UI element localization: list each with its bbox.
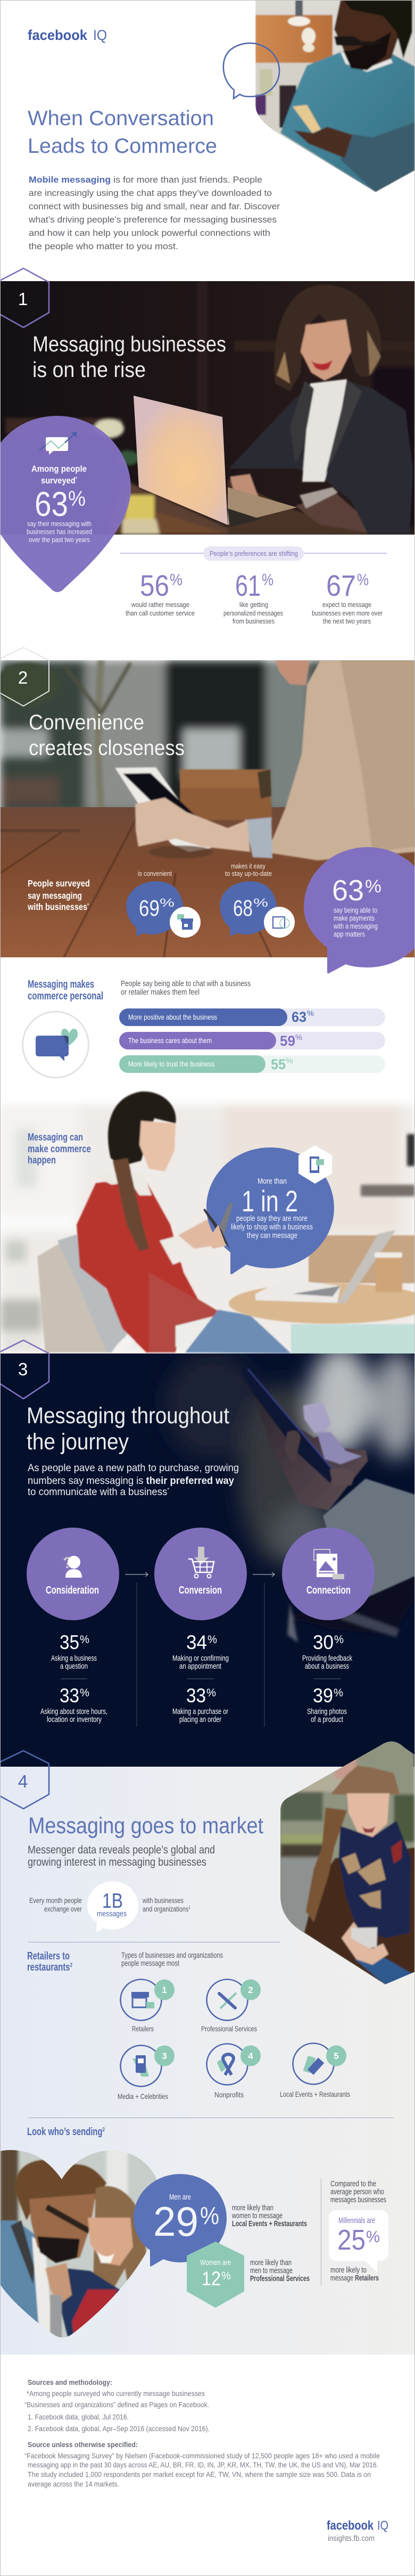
callout: millennials 25 percent: Millennials are: [338, 2216, 375, 2225]
text: people say being able to chat: People say being able to chat with a business: [121, 980, 251, 988]
stats: connection: of a product: [311, 1716, 343, 1724]
section 2 title: creates closeness: [29, 736, 185, 760]
callout: 63 percent payments: [304, 847, 415, 973]
bar: trust 55 percent: More likely to trust the business: [128, 1060, 214, 1068]
stats: consideration: Asking a business: [51, 1654, 97, 1663]
panel: section 4 paper background: [0, 1767, 415, 2355]
section 3 title: [27, 1403, 229, 1455]
panel: connection: Connection: [306, 1585, 351, 1596]
footer: sources and methodology: average across the 14 markets.: [28, 2480, 119, 2488]
bar: cares 59 percent: 59: [280, 1033, 295, 1049]
hexagon badge 4: [0, 1751, 49, 1809]
rank 3: media and celebrities: Media + Celebrities: [118, 2092, 168, 2101]
stats: conversion: an appointment: [179, 1662, 221, 1671]
text: people say being able to chat: or retailer makes them feel: [121, 988, 200, 997]
intro paragraph: [28, 175, 280, 251]
stats: consideration: Asking about store hours,: [40, 1708, 107, 1716]
heading: messaging makes commerce personal: commerce personal: [28, 990, 103, 1002]
text: men more likely: women to message: [231, 2211, 283, 2220]
stat bubble: 69 percent convenient: is convenient: [138, 869, 172, 877]
text: types of businesses: [121, 1951, 223, 1968]
stat: 61 percent: 61: [235, 569, 261, 602]
bar chart: feelings: [119, 1008, 385, 1073]
hexagon badge 2: 2: [18, 668, 28, 687]
rank 4: nonprofits: 4: [248, 2051, 253, 2061]
stats: connection: 30: [313, 1631, 334, 1653]
title: When Conversation: [28, 107, 214, 130]
panel: section 1 photo, woman with laptop: [0, 281, 415, 535]
bar: cares 59 percent: The business cares about them: [128, 1036, 212, 1045]
rank 1: retailers: [120, 1980, 175, 2033]
stat: 61 percent: %: [262, 570, 273, 589]
text: people surveyed say: with businesses: [28, 901, 99, 912]
bar: trust 55 percent: %: [286, 1056, 293, 1065]
callout: millennials 25 percent: [329, 2210, 388, 2273]
hexagon badge 4: 4: [18, 1771, 28, 1791]
icon: ribbon: [217, 2054, 234, 2075]
heading: retailers to restaurants: Retailers to: [27, 1950, 70, 1962]
photo: woman in hat with scarf: [277, 1738, 415, 1989]
rank 1: retailers: Retailers: [132, 2024, 154, 2033]
text: women more likely: [250, 2258, 310, 2283]
rank 3: media and celebrities: 3: [162, 2051, 167, 2061]
callout: 63 percent payments: 63: [332, 874, 364, 907]
photo: man in teal sweater looking at phone: [255, 0, 415, 194]
text: people surveyed say: say messaging: [28, 890, 82, 901]
rank 5: local events and restaurants: [280, 2044, 350, 2098]
text: people surveyed say: *: [87, 903, 89, 908]
heading: messaging can make commerce happen: [28, 1132, 91, 1166]
section 1 title: Messaging businesses: [32, 332, 226, 356]
text: women more likely: more likely than: [250, 2258, 292, 2267]
footer: sources and methodology: The study included 1,000 respondents per market except for AE, TW, VN, where the sample size was 500. Data is on: [28, 2470, 371, 2479]
heading: messaging can make commerce happen: Messaging can: [28, 1132, 83, 1143]
icon: photo cards: [314, 1549, 344, 1579]
text: messaging increased: say their messaging with: [27, 520, 92, 528]
text: men more likely: more likely than: [232, 2203, 273, 2212]
icon: store: [131, 1992, 154, 2008]
section 3 title: Messaging throughout: [27, 1403, 229, 1429]
panel: consideration: [27, 1528, 119, 1620]
heading: messaging makes commerce personal: Messaging makes: [28, 979, 94, 990]
stats: conversion: 34: [186, 1631, 207, 1653]
intro paragraph: are increasingly using the chat apps they’ve downloaded to: [29, 188, 272, 198]
footer: sources and methodology: [24, 2378, 380, 2488]
stat: 56 percent: [126, 569, 195, 617]
icon: outlined speech bubble: [223, 43, 279, 99]
panel: conversion: [154, 1528, 247, 1620]
heading: among people surveyed: surveyed: [41, 475, 81, 486]
heading: among people surveyed: [31, 464, 87, 486]
callout: 1 in 2 people: people say they are more: [236, 1215, 308, 1223]
heading: look who's sending: Look who’s sending: [27, 2126, 129, 2138]
stat: 67 percent: [312, 569, 383, 625]
callout: 63 percent payments: make payments: [334, 914, 375, 922]
stat: 1B messages: 1: [189, 1905, 190, 1910]
stat: 67 percent: businesses even more over: [312, 610, 383, 617]
intro paragraph: and how it can help you unlock powerful connections with: [29, 228, 270, 238]
rank 4: nonprofits: [206, 2044, 261, 2099]
hexagon badge 2: [0, 647, 49, 706]
callout: men 29 percent: %: [200, 2202, 219, 2229]
text: men more likely: Local Events + Restaurants: [232, 2219, 307, 2228]
text: messaging increased: [27, 520, 92, 544]
callout: 1 in 2 people: 1 in 2: [242, 1184, 298, 1218]
text: men more likely: [231, 2203, 307, 2228]
stats: conversion: [172, 1631, 229, 1724]
stat: 61 percent: like getting: [239, 601, 268, 609]
logo: facebook IQ footer: [327, 2518, 388, 2543]
heading: among people surveyed: *: [76, 476, 77, 481]
stat: 1B messages: exchange over: [44, 1905, 82, 1913]
rank 1: retailers: 1: [162, 1985, 167, 1995]
section 3 intro text: [28, 1463, 239, 1498]
icon: person with question: [63, 1554, 82, 1578]
stat: 67 percent: the next two years: [323, 618, 371, 625]
text: people say being able to chat: [121, 980, 251, 997]
text: messaging increased: over the past two years: [29, 536, 90, 544]
stat: 56 percent: %: [170, 570, 182, 589]
intro paragraph: the people who matter to you most.: [29, 241, 178, 251]
section 2 title: Convenience: [29, 711, 144, 734]
hexagon badge 3: [0, 1340, 49, 1399]
logo: facebook IQ: facebook: [28, 27, 88, 43]
section 1 title: is on the rise: [32, 357, 146, 382]
arrow 1: [125, 1572, 148, 1577]
section 4 subtitle: [28, 1844, 215, 1868]
panel: section 2 photo, woman with tablet: [0, 660, 415, 957]
stat: 63 percent: 63: [35, 485, 68, 523]
stats: consideration: %: [80, 1687, 89, 1699]
text: millennials more likely: more likely to: [330, 2266, 367, 2275]
section 4 subtitle: growing interest in messaging businesses: [28, 1856, 206, 1868]
icon: speech bubble with heart: [22, 1012, 88, 1078]
icon: calendar: [264, 907, 295, 938]
callout: men 29 percent: Men are: [169, 2193, 191, 2202]
heading: look who's sending: 2: [102, 2127, 105, 2133]
footer: sources and methodology: “Facebook Messaging Survey” by Nielsen (Facebook-commissioned study of 12,500 people ages 18+ who used a mobile: [24, 2451, 380, 2460]
stats: conversion: Making a purchase or: [172, 1708, 228, 1716]
intro paragraph: connect with businesses big and small, near and far. Discover: [29, 201, 280, 211]
rank 3: media and celebrities: [118, 2046, 175, 2101]
panel: connection: [282, 1528, 375, 1620]
stat: 67 percent: expect to message: [322, 601, 371, 609]
callout: 1 in 2 people: More than: [258, 1177, 287, 1186]
stats: conversion: placing an order: [179, 1716, 221, 1724]
footer: sources and methodology: “Businesses and organizations” defined as Pages on Facebook.: [24, 2400, 209, 2409]
arrow 2: [253, 1572, 275, 1577]
hexagon badge 3: 3: [18, 1359, 28, 1379]
text: millennials more likely: message Retailers: [330, 2274, 379, 2283]
stats: connection: %: [334, 1634, 344, 1646]
stats: consideration: %: [80, 1634, 89, 1646]
section 4 subtitle: Messenger data reveals people’s global and: [28, 1844, 215, 1856]
logo: facebook IQ: IQ: [93, 27, 107, 43]
bar: trust 55 percent: 55: [271, 1056, 286, 1072]
section 1 title: [32, 332, 226, 382]
panel: consideration: Consideration: [46, 1585, 99, 1596]
text: women more likely: men to message: [250, 2266, 293, 2275]
icon: wrench and screwdriver: [219, 1993, 236, 2008]
stats: connection: Providing feedback: [302, 1654, 353, 1663]
heading: retailers to restaurants: [27, 1950, 72, 1973]
bar: more positive 63 percent: %: [307, 1009, 314, 1018]
footer: sources and methodology: *Among people surveyed who currently message businesses: [27, 2389, 205, 2398]
icon: storefront: [170, 907, 201, 938]
callout: 63 percent payments: app matters: [334, 930, 365, 938]
icon: phone with message in hexagon: [298, 1145, 332, 1184]
stats: consideration: [40, 1631, 107, 1724]
section 3 intro text: numbers say messaging is their preferred way: [28, 1475, 234, 1487]
stat: 56 percent: would rather message: [131, 601, 189, 609]
stat: 61 percent: [223, 569, 283, 625]
bar: more positive 63 percent: More positive about the business: [128, 1013, 217, 1021]
text: types of businesses: Types of businesses and organizations: [121, 1951, 223, 1960]
rank 2: professional services: Professional Services: [201, 2024, 257, 2033]
photo: woman in red sweater with phone: [0, 1092, 415, 1356]
stat bubble: 69 percent convenient: [126, 869, 201, 938]
logo: facebook IQ footer: insights.fb.com: [328, 2534, 375, 2543]
stat bubble: 68 percent up-to-date: %: [253, 896, 268, 909]
callout: 63 percent payments: with a messaging: [333, 922, 378, 930]
stats: connection: Sharing photos: [307, 1708, 347, 1716]
section 4 title: Messaging goes to market: [28, 1813, 263, 1839]
stat: 56 percent: 56: [140, 569, 169, 602]
bar: more positive 63 percent: 63: [292, 1009, 306, 1025]
section 2 title: [29, 711, 185, 760]
text: millennials more likely: [330, 2266, 379, 2283]
stat bubble: 69 percent convenient: 69: [139, 896, 160, 921]
text: compared to the average person: [330, 2179, 386, 2204]
stats: consideration: 33: [60, 1685, 79, 1707]
stats: conversion: %: [206, 1687, 216, 1699]
footer: sources and methodology: Sources and methodology:: [28, 2378, 112, 2386]
footer: sources and methodology: Source unless otherwise specified:: [28, 2440, 138, 2449]
stat: 1B messages: messages: [97, 1909, 127, 1918]
text: types of businesses: people message most: [121, 1959, 179, 1968]
pill header: preferences shifting: [120, 546, 387, 561]
hexagon badge 1: 1: [18, 289, 28, 309]
icon: phone: [132, 2055, 149, 2077]
pill header: preferences shifting: People’s preferences are shifting: [210, 549, 298, 557]
callout: men 29 percent: 29: [153, 2198, 198, 2245]
stats: consideration: a question: [60, 1662, 88, 1671]
title: Leads to Commerce: [28, 135, 217, 158]
bar: cares 59 percent: %: [295, 1033, 302, 1042]
panel: section 3 dark photo, hand with phone: [0, 1347, 415, 1767]
text: women more likely: Professional Services: [250, 2274, 310, 2283]
stat: 1B messages: [29, 1881, 190, 1932]
title: [28, 107, 217, 158]
callout: women 12 percent: %: [221, 2270, 231, 2282]
stats: conversion: 33: [186, 1685, 206, 1707]
callout: millennials 25 percent: 25: [337, 2224, 366, 2256]
photo: laughing couple in heart shape: [0, 2146, 165, 2343]
section 3 intro text: *: [167, 1487, 169, 1493]
footer: sources and methodology: 1. Facebook data, global, Jul 2016.: [28, 2413, 129, 2421]
stat: 56 percent: than call customer service: [126, 610, 195, 617]
section 3 intro text: to communicate with a business: [28, 1487, 171, 1498]
text: messaging increased: businesses has increased: [27, 528, 92, 536]
stat bubble: 68 percent up-to-date: 68: [233, 896, 253, 921]
callout: women 12 percent: [187, 2242, 244, 2307]
stats: consideration: location or inventory: [47, 1716, 102, 1724]
stats: conversion: Making or confirming: [172, 1654, 229, 1663]
callout: 63 percent payments: %: [365, 876, 381, 897]
section 3 title: the journey: [27, 1429, 129, 1455]
icon: chart speech bubble: [39, 432, 77, 455]
callout: women 12 percent: 12: [202, 2268, 221, 2290]
text: people surveyed say: People surveyed: [28, 878, 90, 889]
stats: connection: %: [334, 1687, 343, 1699]
callout: women 12 percent: Women are: [200, 2259, 231, 2267]
callout: men 29 percent: [134, 2174, 227, 2267]
text: compared to the average person: average person who: [330, 2187, 384, 2196]
icon: shopping cart: [188, 1547, 214, 1578]
stat: 67 percent: %: [357, 570, 369, 589]
icon: person with question: ?: [63, 1554, 72, 1572]
stat bubble: 69 percent convenient: %: [160, 896, 175, 909]
intro paragraph: what’s driving people’s preference for messaging businesses: [28, 215, 277, 225]
rank 5: local events and restaurants: 5: [334, 2051, 339, 2061]
callout: millennials 25 percent: %: [366, 2227, 380, 2246]
logo: facebook IQ footer: IQ: [377, 2518, 388, 2533]
stats: connection: [302, 1631, 353, 1724]
icon: tickets: [303, 2056, 324, 2075]
section 3 intro text: As people pave a new path to purchase, growing: [28, 1463, 239, 1474]
stat: 1B messages: and organizations: [143, 1905, 202, 1913]
stat bubble: 68 percent up-to-date: [220, 862, 295, 938]
rank 2: professional services: 2: [248, 1985, 253, 1995]
footer: sources and methodology: 2. Facebook data, global, Apr–Sep 2016 (accessed Nov 2016).: [28, 2424, 210, 2433]
heading: among people surveyed: Among people: [31, 464, 87, 474]
stat: 61 percent: from businesses: [233, 618, 275, 625]
stat: 63 percent: %: [68, 487, 86, 511]
heading: retailers to restaurants: 2: [70, 1962, 72, 1968]
bar: cares 59 percent: [119, 1032, 385, 1049]
text: compared to the average person: messages businesses: [330, 2195, 386, 2204]
stat bubble: 68 percent up-to-date: makes it easy: [231, 862, 265, 870]
callout: 1 in 2 people: they can message: [247, 1232, 297, 1240]
stat bubble: 68 percent up-to-date: to stay up-to-date: [225, 869, 272, 877]
stats: consideration: 35: [60, 1631, 79, 1653]
stats: connection: 39: [313, 1685, 333, 1707]
text: compared to the average person: Compared to the: [330, 2179, 376, 2188]
stats: conversion: %: [208, 1634, 217, 1646]
stat: 1B messages: 1B: [102, 1890, 123, 1913]
callout: 1 in 2 people: likely to shop with a business: [231, 1223, 313, 1232]
intro paragraph: Mobile messaging is for more than just friends. People: [29, 175, 262, 185]
stat: 1B messages: with businesses: [142, 1896, 184, 1905]
rank 5: local events and restaurants: Local Events + Restaurants: [280, 2090, 350, 2098]
heading: messaging can make commerce happen: happen: [28, 1155, 56, 1166]
panel: conversion: Conversion: [179, 1585, 222, 1596]
stat: 67 percent: 67: [326, 569, 356, 602]
stat: 61 percent: personalized messages: [223, 610, 283, 617]
bar: more positive 63 percent: [119, 1008, 385, 1026]
bar: trust 55 percent: [119, 1055, 385, 1073]
text: people surveyed say: [27, 878, 90, 912]
callout: 63 percent payments: say being able to: [334, 906, 377, 914]
stat: 1B messages: Every month people: [29, 1896, 82, 1905]
heading: retailers to restaurants: restaurants: [27, 1962, 85, 1973]
rank 2: professional services: [201, 1980, 261, 2033]
logo: facebook IQ footer: facebook: [327, 2518, 374, 2533]
column dividers: [137, 1582, 264, 1727]
callout: 1 in 2 people: [203, 1145, 334, 1274]
stats: connection: about a business: [305, 1662, 349, 1671]
panel: purple teardrop callout: [0, 416, 131, 592]
heading: messaging makes commerce personal: [28, 979, 103, 1002]
hexagon badge 1: [0, 268, 49, 327]
rank 4: nonprofits: Nonprofits: [214, 2090, 244, 2099]
heading: messaging can make commerce happen: make commerce: [28, 1144, 91, 1155]
